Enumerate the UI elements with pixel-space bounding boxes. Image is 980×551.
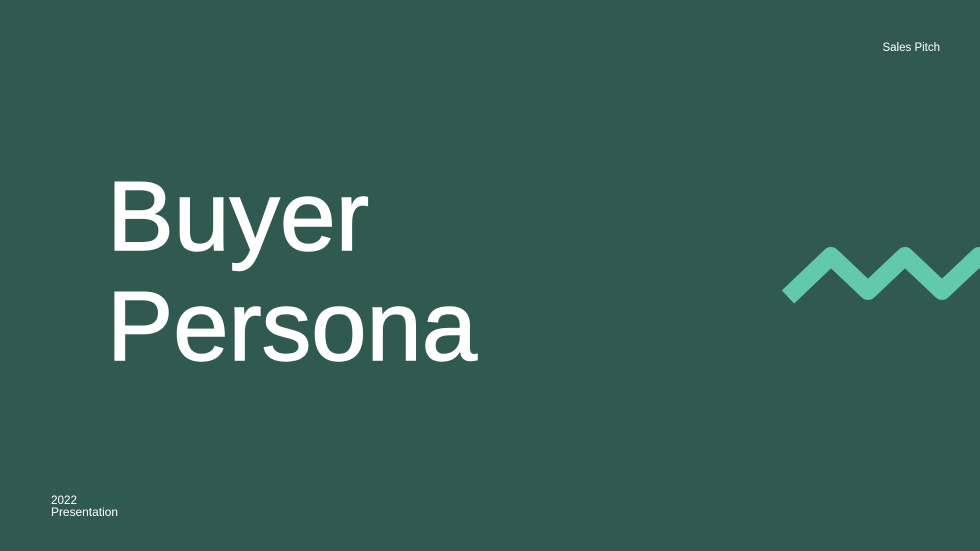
title: Buyer: [107, 161, 369, 271]
icon: zigzag line: [788, 256, 980, 297]
label: Sales Pitch: Sales Pitch: [882, 42, 940, 54]
title: [107, 161, 477, 381]
footer text: 2022 Presentation: 2022: [51, 494, 77, 507]
title: Persona: [107, 271, 477, 381]
footer text: 2022 Presentation: Presentation: [51, 505, 118, 519]
footer text: 2022 Presentation: [51, 494, 118, 519]
